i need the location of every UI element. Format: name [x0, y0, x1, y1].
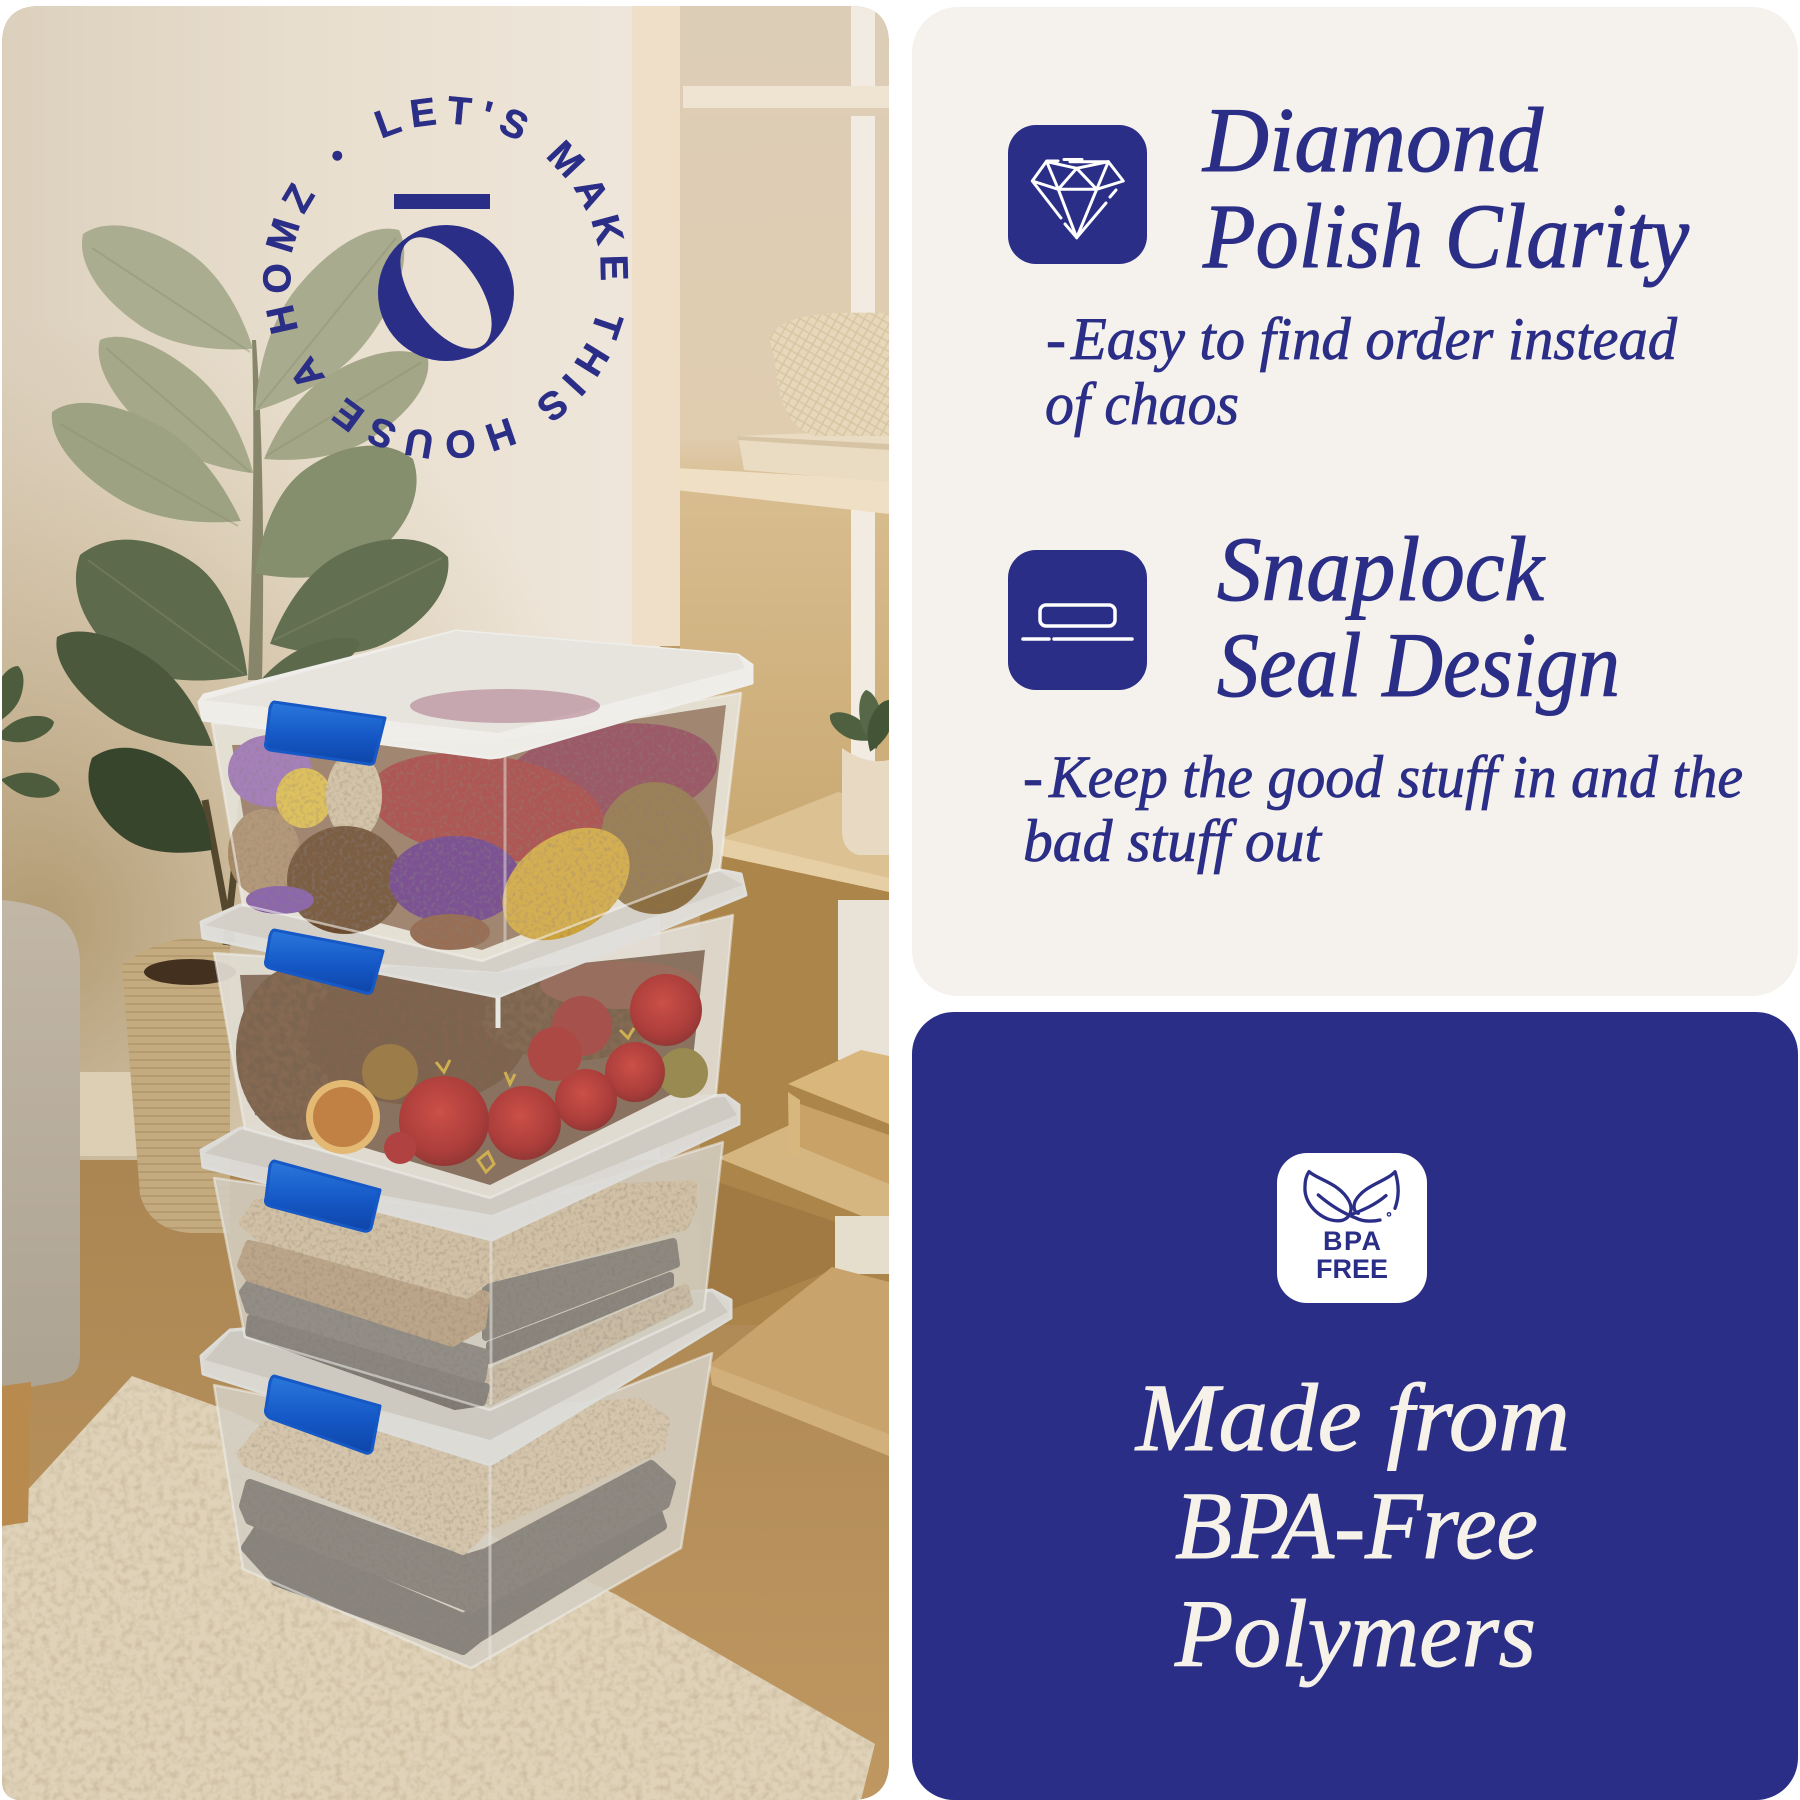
text: keep the good stuff: - [1023, 744, 1043, 810]
woven rug [0, 1376, 875, 1800]
small plant left [2, 666, 60, 798]
heading: snaplock seal design: Snaplock [1217, 518, 1546, 620]
box 3: towels [201, 1095, 739, 1410]
drawer box [788, 1050, 889, 1184]
badge text [1316, 1226, 1388, 1284]
icon: diamond [1008, 125, 1147, 264]
panel: product photo [2, 6, 889, 1800]
panel: features [912, 7, 1798, 996]
wicker basket [769, 313, 889, 436]
text: keep the good stuff [1023, 744, 1743, 874]
heading: diamond polish clarity: Polish Clarity [1202, 185, 1689, 287]
heading: made from bpa-free polymers: BPA-Free [1175, 1472, 1538, 1579]
text: keep the good stuff: bad stuff out [1023, 808, 1322, 874]
shelving unit [632, 0, 889, 1456]
icon: snaplock [1008, 550, 1147, 690]
small plant and pot right [830, 690, 889, 855]
heading: diamond polish clarity: Diamond [1201, 89, 1544, 191]
storage box stack [199, 631, 752, 1668]
badge text: BPA [1323, 1226, 1381, 1256]
armchair [2, 900, 80, 1526]
text: easy to find order [1045, 306, 1678, 437]
wall [0, 0, 660, 1200]
logo letter o [378, 225, 514, 361]
box 1: yarn and knits [199, 631, 752, 963]
heading: made from bpa-free polymers: Polymers [1174, 1580, 1536, 1687]
heading: snaplock seal design: Seal Design [1217, 614, 1620, 716]
baseboard [80, 1072, 140, 1156]
panel: bpa free [912, 1012, 1798, 1800]
books [738, 430, 889, 482]
box 2: pinecones and ornaments [201, 870, 746, 1198]
badge text: FREE [1316, 1254, 1388, 1284]
planter basket [122, 938, 236, 1233]
scene base [0, 0, 889, 1800]
heading: made from bpa-free polymers: Made from [1134, 1364, 1570, 1471]
text: easy to find order: of chaos [1045, 371, 1239, 437]
logo bar [394, 194, 490, 209]
icon: bpa free badge [1277, 1153, 1427, 1303]
leaves [1305, 1172, 1398, 1221]
heading: diamond polish clarity [1201, 89, 1689, 287]
text: easy to find order: Easy to find order instead [1070, 306, 1678, 372]
heading: made from bpa-free polymers [1134, 1364, 1570, 1687]
logo ring text [290, 124, 601, 432]
logo: circular badge: LET'S MAKE THIS HOUSE A HOMZ [262, 96, 628, 459]
box 4: towels [201, 1290, 731, 1668]
heading: snaplock seal design [1217, 518, 1620, 716]
text: easy to find order: - [1046, 306, 1066, 372]
text: keep the good stuff: Keep the good stuff in and the [1048, 744, 1743, 810]
fiddle leaf plant [31, 198, 470, 945]
wooden floor [0, 1160, 889, 1800]
logo ring dot [332, 151, 342, 161]
